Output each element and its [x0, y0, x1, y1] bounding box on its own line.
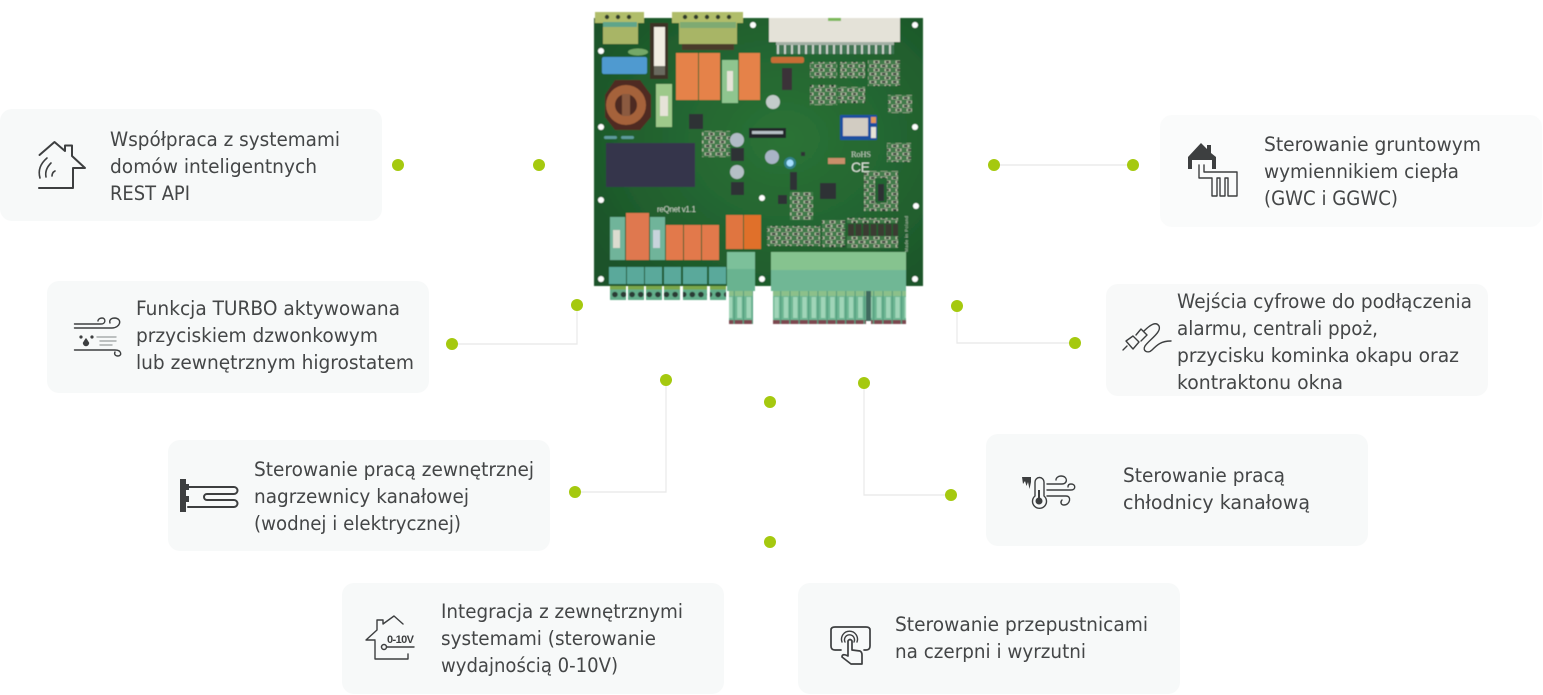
flat connector [749, 128, 786, 138]
switch [828, 158, 845, 164]
text: integration: wydajnością 0-10V) [441, 654, 618, 677]
RoHS mark: RoHS [851, 149, 871, 159]
connector lines [452, 165, 1133, 495]
text: ground heat exchanger [1264, 133, 1481, 210]
orange relays top [676, 53, 760, 100]
text: smart home [110, 128, 340, 205]
made in poland: Made in Poland [904, 216, 909, 252]
text: dampers: na czerpni i wyrzutni [895, 640, 1086, 663]
icon: heater coil [180, 479, 238, 512]
text: digital inputs: alarmu, centrali ppoż, [1177, 317, 1378, 340]
text: duct cooler: chłodnicy kanałową [1123, 491, 1310, 514]
icon: wind and drops [74, 318, 121, 356]
text: turbo: Funkcja TURBO aktywowana [136, 297, 400, 320]
mounting holes [598, 22, 919, 282]
icon: house 0-10V: 0-10V [387, 634, 415, 646]
icon: house 0-10V [366, 616, 415, 659]
text: digital inputs: kontraktonu okna [1177, 371, 1343, 394]
icon: touch hand [831, 627, 870, 664]
small green capacitor [628, 48, 648, 56]
icon: house with ground loop [1188, 143, 1237, 196]
large bottom terminal [771, 252, 906, 324]
text: integration: systemami (sterowanie [441, 627, 656, 650]
panel: smart home [0, 109, 382, 221]
top middle terminal [672, 12, 743, 50]
capacitors [730, 95, 780, 179]
bottom relays [626, 213, 761, 260]
bottom left terminals [609, 267, 726, 300]
smd clusters [702, 60, 912, 248]
dark chip row [848, 224, 898, 236]
top left power terminal [595, 12, 644, 44]
orange diode strip [771, 57, 804, 63]
board base [594, 18, 923, 286]
text: duct heater: Sterowanie pracą zewnętrznej [254, 458, 534, 481]
text: dampers: Sterowanie przepustnicami [895, 613, 1148, 636]
panel: duct heater [168, 440, 550, 551]
teal fuse holders [610, 217, 665, 260]
text: smart home: Współpraca z systemami [110, 128, 340, 151]
text: smart home: domów inteligentnych [110, 155, 317, 178]
transformer [606, 143, 695, 187]
panel: digital inputs [1106, 284, 1488, 396]
small blue-green capacitors [604, 136, 634, 139]
icon: plug and cable [1123, 324, 1171, 352]
text: turbo: lub zewnętrznym higrostatem [136, 351, 414, 374]
text: dampers [895, 613, 1148, 663]
panel: ground heat exchanger [1160, 115, 1542, 227]
text: duct heater: (wodnej i elektrycznej) [254, 512, 461, 535]
text: digital inputs: przycisku kominka okapu oraz [1177, 344, 1459, 367]
bluetooth module [840, 115, 877, 140]
middle bottom terminal [727, 252, 755, 324]
text: ground heat exchanger: Sterowanie gruntowym [1264, 133, 1481, 156]
text: duct cooler: Sterowanie pracą [1123, 464, 1285, 487]
icon: house with wifi [39, 142, 85, 188]
text: duct heater [254, 458, 534, 535]
panel: turbo [47, 281, 429, 393]
text: duct cooler [1123, 464, 1310, 514]
fuse [650, 23, 668, 79]
board name: reQnet v1.1 [657, 205, 697, 214]
text: ground heat exchanger: (GWC i GGWC) [1264, 187, 1398, 210]
blue capacitor [602, 57, 647, 74]
text: turbo [136, 297, 414, 374]
text: duct heater: nagrzewnicy kanałowej [254, 485, 469, 508]
text: digital inputs: Wejścia cyfrowe do podłączenia [1177, 290, 1472, 313]
white ribbon connector [769, 18, 900, 54]
blue led [784, 157, 796, 169]
panel: dampers [798, 583, 1180, 694]
icon: thermometer and wind [1022, 476, 1075, 508]
text: integration [441, 600, 683, 677]
CE mark: CE [851, 159, 870, 175]
text: turbo: przyciskiem dzwonkowym [136, 324, 378, 347]
black chips [689, 68, 884, 204]
panel: integration [342, 583, 724, 694]
text: smart home: REST API [110, 182, 190, 205]
panel: duct cooler [986, 434, 1368, 546]
green fuse holders top [656, 60, 738, 127]
circuit board [594, 12, 923, 324]
connector dots [392, 159, 1139, 548]
text: digital inputs [1177, 290, 1472, 394]
toroid coil [605, 80, 651, 130]
text: ground heat exchanger: wymiennikiem ciepła [1264, 160, 1459, 183]
text: integration: Integracja z zewnętrznymi [441, 600, 683, 623]
